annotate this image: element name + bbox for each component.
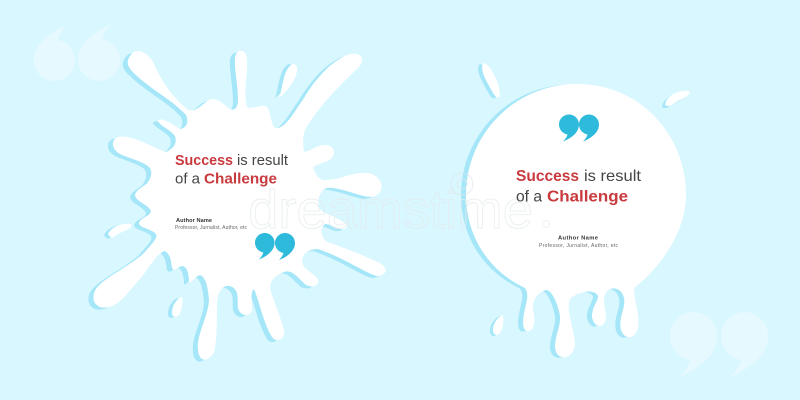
- right author name: Author Name: [558, 236, 599, 242]
- left author role: Professor, Jurnalist, Author, etc: [175, 225, 248, 231]
- left quote heading: Success: [175, 152, 233, 169]
- left author name: Author Name: [176, 218, 212, 224]
- right quote heading: Challenge: [547, 188, 628, 206]
- left quote heading: [175, 152, 289, 188]
- decorative pale quote bottom right: [670, 312, 768, 377]
- right quote heading: is result: [584, 168, 642, 185]
- right quote heading: of a: [516, 188, 542, 206]
- left splash shape: [88, 51, 386, 362]
- decorative pale quote top left: [34, 24, 120, 81]
- right teal quote mark: [559, 114, 599, 142]
- watermark: dreamstime: [248, 180, 533, 240]
- left teal quote mark: [255, 233, 295, 260]
- left quote heading: is result: [237, 152, 289, 169]
- left quote heading: of a: [175, 170, 201, 188]
- right quote heading: Success: [516, 168, 579, 185]
- right drip circle shape: [461, 63, 690, 358]
- right author role: Professor, Jurnalist, Author, etc: [539, 243, 618, 249]
- left quote heading: Challenge: [204, 170, 277, 188]
- right quote heading: [516, 168, 642, 206]
